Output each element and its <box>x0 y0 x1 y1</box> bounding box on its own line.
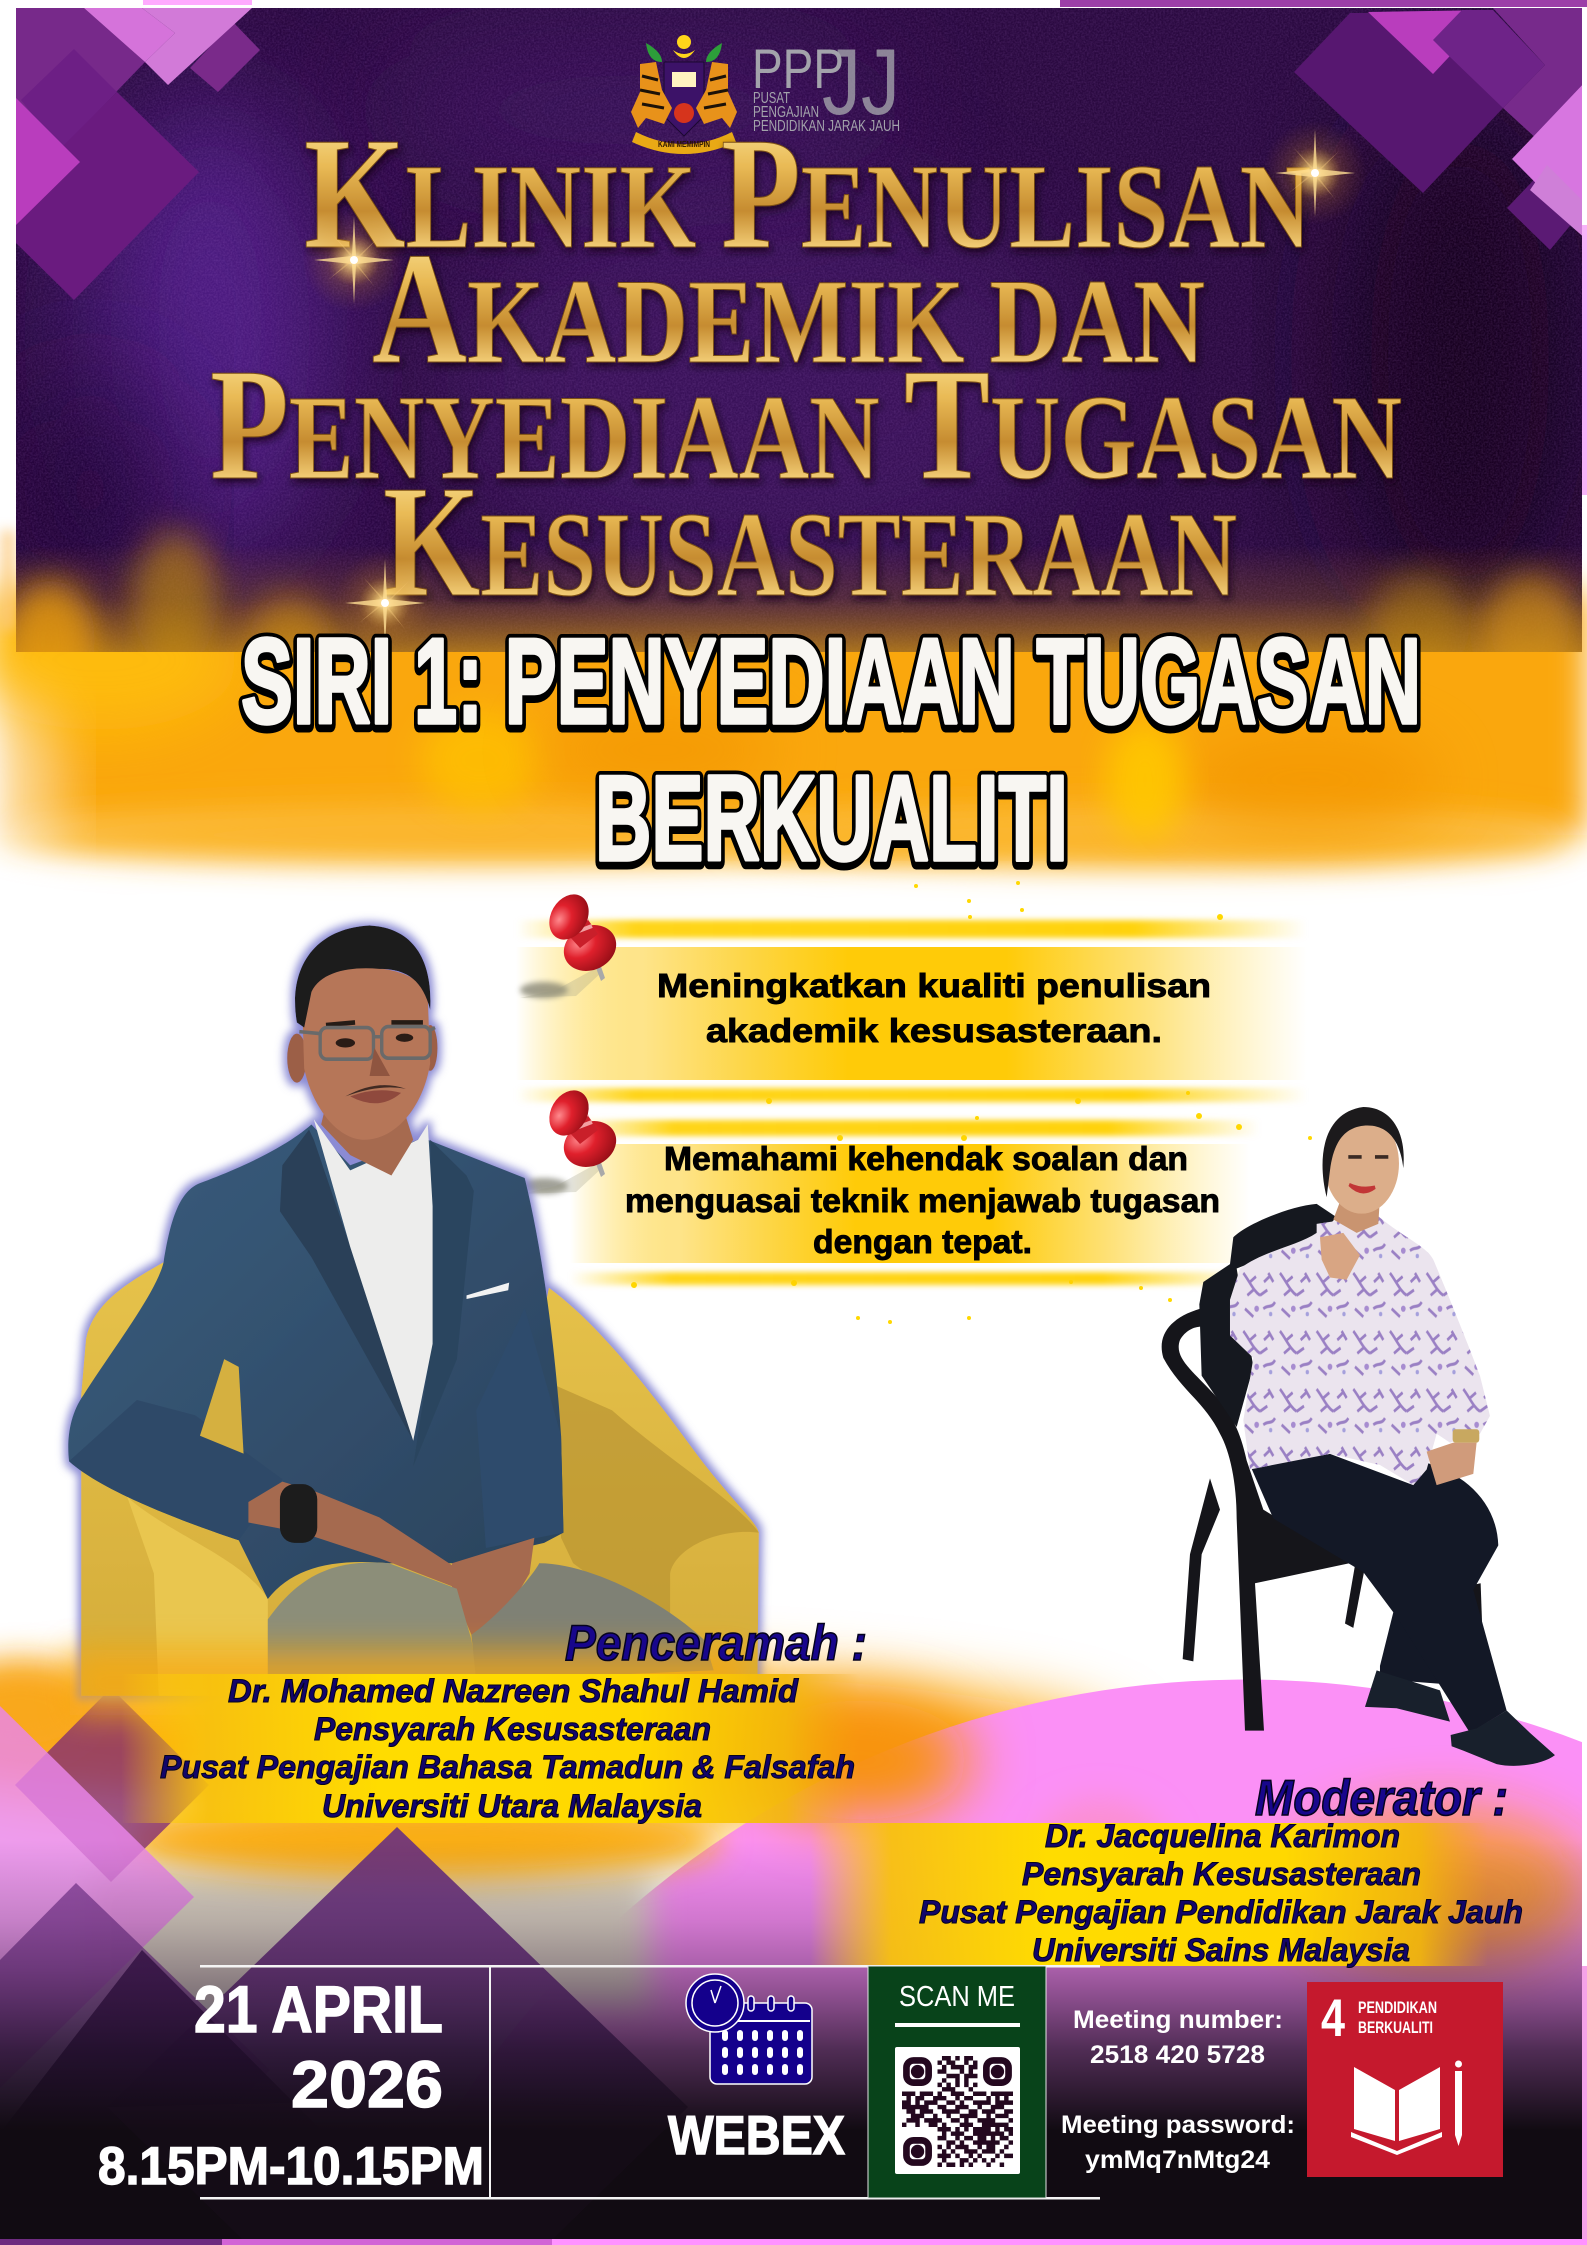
trousers <box>1250 1454 1507 1733</box>
subtitle: series heading: BERKUALITI <box>595 752 1068 888</box>
speaker details <box>160 1673 855 1824</box>
moderator details: Dr. Jacquelina Karimon <box>1045 1818 1400 1854</box>
corner diamonds top right <box>1294 8 1587 250</box>
SDG label <box>1358 1998 1437 2037</box>
objective 1 text <box>657 967 1211 1049</box>
wristwatch <box>280 1484 317 1543</box>
objective 1 text: Meningkatkan kualiti penulisan <box>657 967 1211 1004</box>
logo: PPPJJ wordmark: PENGAJIAN <box>753 104 819 121</box>
panel: purple hero banner <box>0 8 1587 700</box>
moderator details <box>919 1818 1523 1968</box>
meeting details: Meeting password: <box>1061 2111 1295 2139</box>
objective 2 text: Memahami kehendak soalan dan <box>664 1140 1188 1177</box>
title: PENYEDIAAN TUGASAN <box>210 335 1402 513</box>
panel: speaker yellow banner <box>121 1674 860 1823</box>
subtitle: series heading: BERKUALITI <box>595 750 1068 886</box>
title: KLINIK PENULISAN <box>304 104 1311 282</box>
arms and hands <box>248 1482 534 1635</box>
title: AKADEMIK DAN <box>372 219 1205 397</box>
speaker details: Dr. Mohamed Nazreen Shahul Hamid <box>228 1673 799 1709</box>
corner diamonds top left <box>16 8 260 300</box>
logo: PPPJJ wordmark: PPP <box>752 37 844 100</box>
event info frame lines <box>200 1965 1100 2200</box>
meeting details: Meeting number: <box>1073 2006 1283 2034</box>
meeting details: ymMq7nMtg24 <box>1085 2146 1270 2174</box>
icon: open book and pencil <box>1351 2060 1462 2155</box>
moderator details: Pensyarah Kesusasteraan <box>1022 1856 1421 1892</box>
shirt <box>314 1119 433 1441</box>
trousers <box>268 1562 714 1696</box>
logo: Malaysian university coat of arms: KAMI MEMIMPIN <box>658 140 710 149</box>
panel: objective 2 banner <box>570 1120 1260 1285</box>
logo: PPPJJ wordmark: PENDIDIKAN JARAK JAUH <box>753 118 900 135</box>
date and time: 2026 <box>291 2047 443 2121</box>
speaker details: Pensyarah Kesusasteraan <box>314 1711 711 1747</box>
logo: Malaysian university coat of arms <box>631 35 737 154</box>
meeting details <box>1061 2006 1295 2174</box>
shoes <box>1365 1670 1555 1766</box>
photo: moderator on wicker chair <box>1162 1107 1555 1766</box>
objective 1 text: akademik kesusasteraan. <box>706 1012 1162 1049</box>
armchair <box>81 1262 759 1696</box>
logo: PPPJJ wordmark: PUSAT <box>753 90 790 107</box>
moderator details: Universiti Sains Malaysia <box>1032 1932 1410 1968</box>
venue: WEBEX: WEBEX <box>668 2104 845 2166</box>
title: KESUSASTERAAN <box>383 452 1237 630</box>
date and time: 21 APRIL <box>194 1972 443 2046</box>
SDG label: BERKUALITI <box>1358 2018 1433 2037</box>
orange fade over chair base <box>70 1650 750 1715</box>
scan me label: SCAN ME <box>899 1981 1015 2013</box>
QR code <box>895 2047 1020 2174</box>
logo: PPPJJ wordmark <box>752 29 900 135</box>
panel: SDG 4 quality education badge <box>1307 1982 1503 2177</box>
panel: lower background with pink arc and diamonds <box>0 1660 1587 2240</box>
bottom strip <box>0 1966 1587 2245</box>
yellow dots <box>631 881 1312 1324</box>
subtitle: series heading <box>241 613 1421 888</box>
sparkles <box>302 121 1367 655</box>
speaker details: Universiti Utara Malaysia <box>322 1788 702 1824</box>
panel: moderator yellow banner <box>810 1823 1488 1966</box>
neck <box>321 1104 413 1176</box>
moderator label: Moderator : <box>1255 1770 1508 1826</box>
SDG label: PENDIDIKAN <box>1358 1998 1437 2017</box>
objective 2 text: menguasai teknik menjawab tugasan <box>625 1182 1220 1219</box>
logo: PPPJJ wordmark: JJ <box>822 29 900 134</box>
head <box>287 926 437 1140</box>
SDG number: 4 <box>1321 1989 1345 2048</box>
objective 2 text <box>625 1140 1220 1260</box>
orange cloud band <box>0 530 1587 925</box>
date and time: 8.15PM-10.15PM <box>98 2137 484 2196</box>
meeting details: 2518 420 5728 <box>1090 2041 1265 2069</box>
speaker label: Penceramah : <box>565 1615 867 1671</box>
date and time <box>98 1972 484 2196</box>
photo: speaker in yellow armchair <box>68 926 759 1696</box>
moderator details: Pusat Pengajian Pendidikan Jarak Jauh <box>919 1894 1523 1930</box>
hands and watch <box>1320 1233 1479 1485</box>
face and hair <box>1323 1107 1404 1233</box>
icon: calendar with clock <box>686 1974 812 2084</box>
jacket <box>68 1124 563 1599</box>
icon: red push pin 2 <box>520 1083 624 1194</box>
floral blouse <box>1230 1215 1490 1485</box>
wicker chair <box>1162 1309 1483 1731</box>
icon: red push pin 1 <box>520 887 624 998</box>
speaker details: Pusat Pengajian Bahasa Tamadun & Falsafah <box>160 1749 855 1785</box>
jacket over shoulder <box>1199 1204 1337 1427</box>
title <box>210 104 1402 630</box>
panel: objective 1 banner <box>516 920 1307 1102</box>
golden flames <box>5 530 1582 700</box>
objective 2 text: dengan tepat. <box>813 1223 1032 1260</box>
panel: scan me QR card <box>868 1966 1046 2198</box>
